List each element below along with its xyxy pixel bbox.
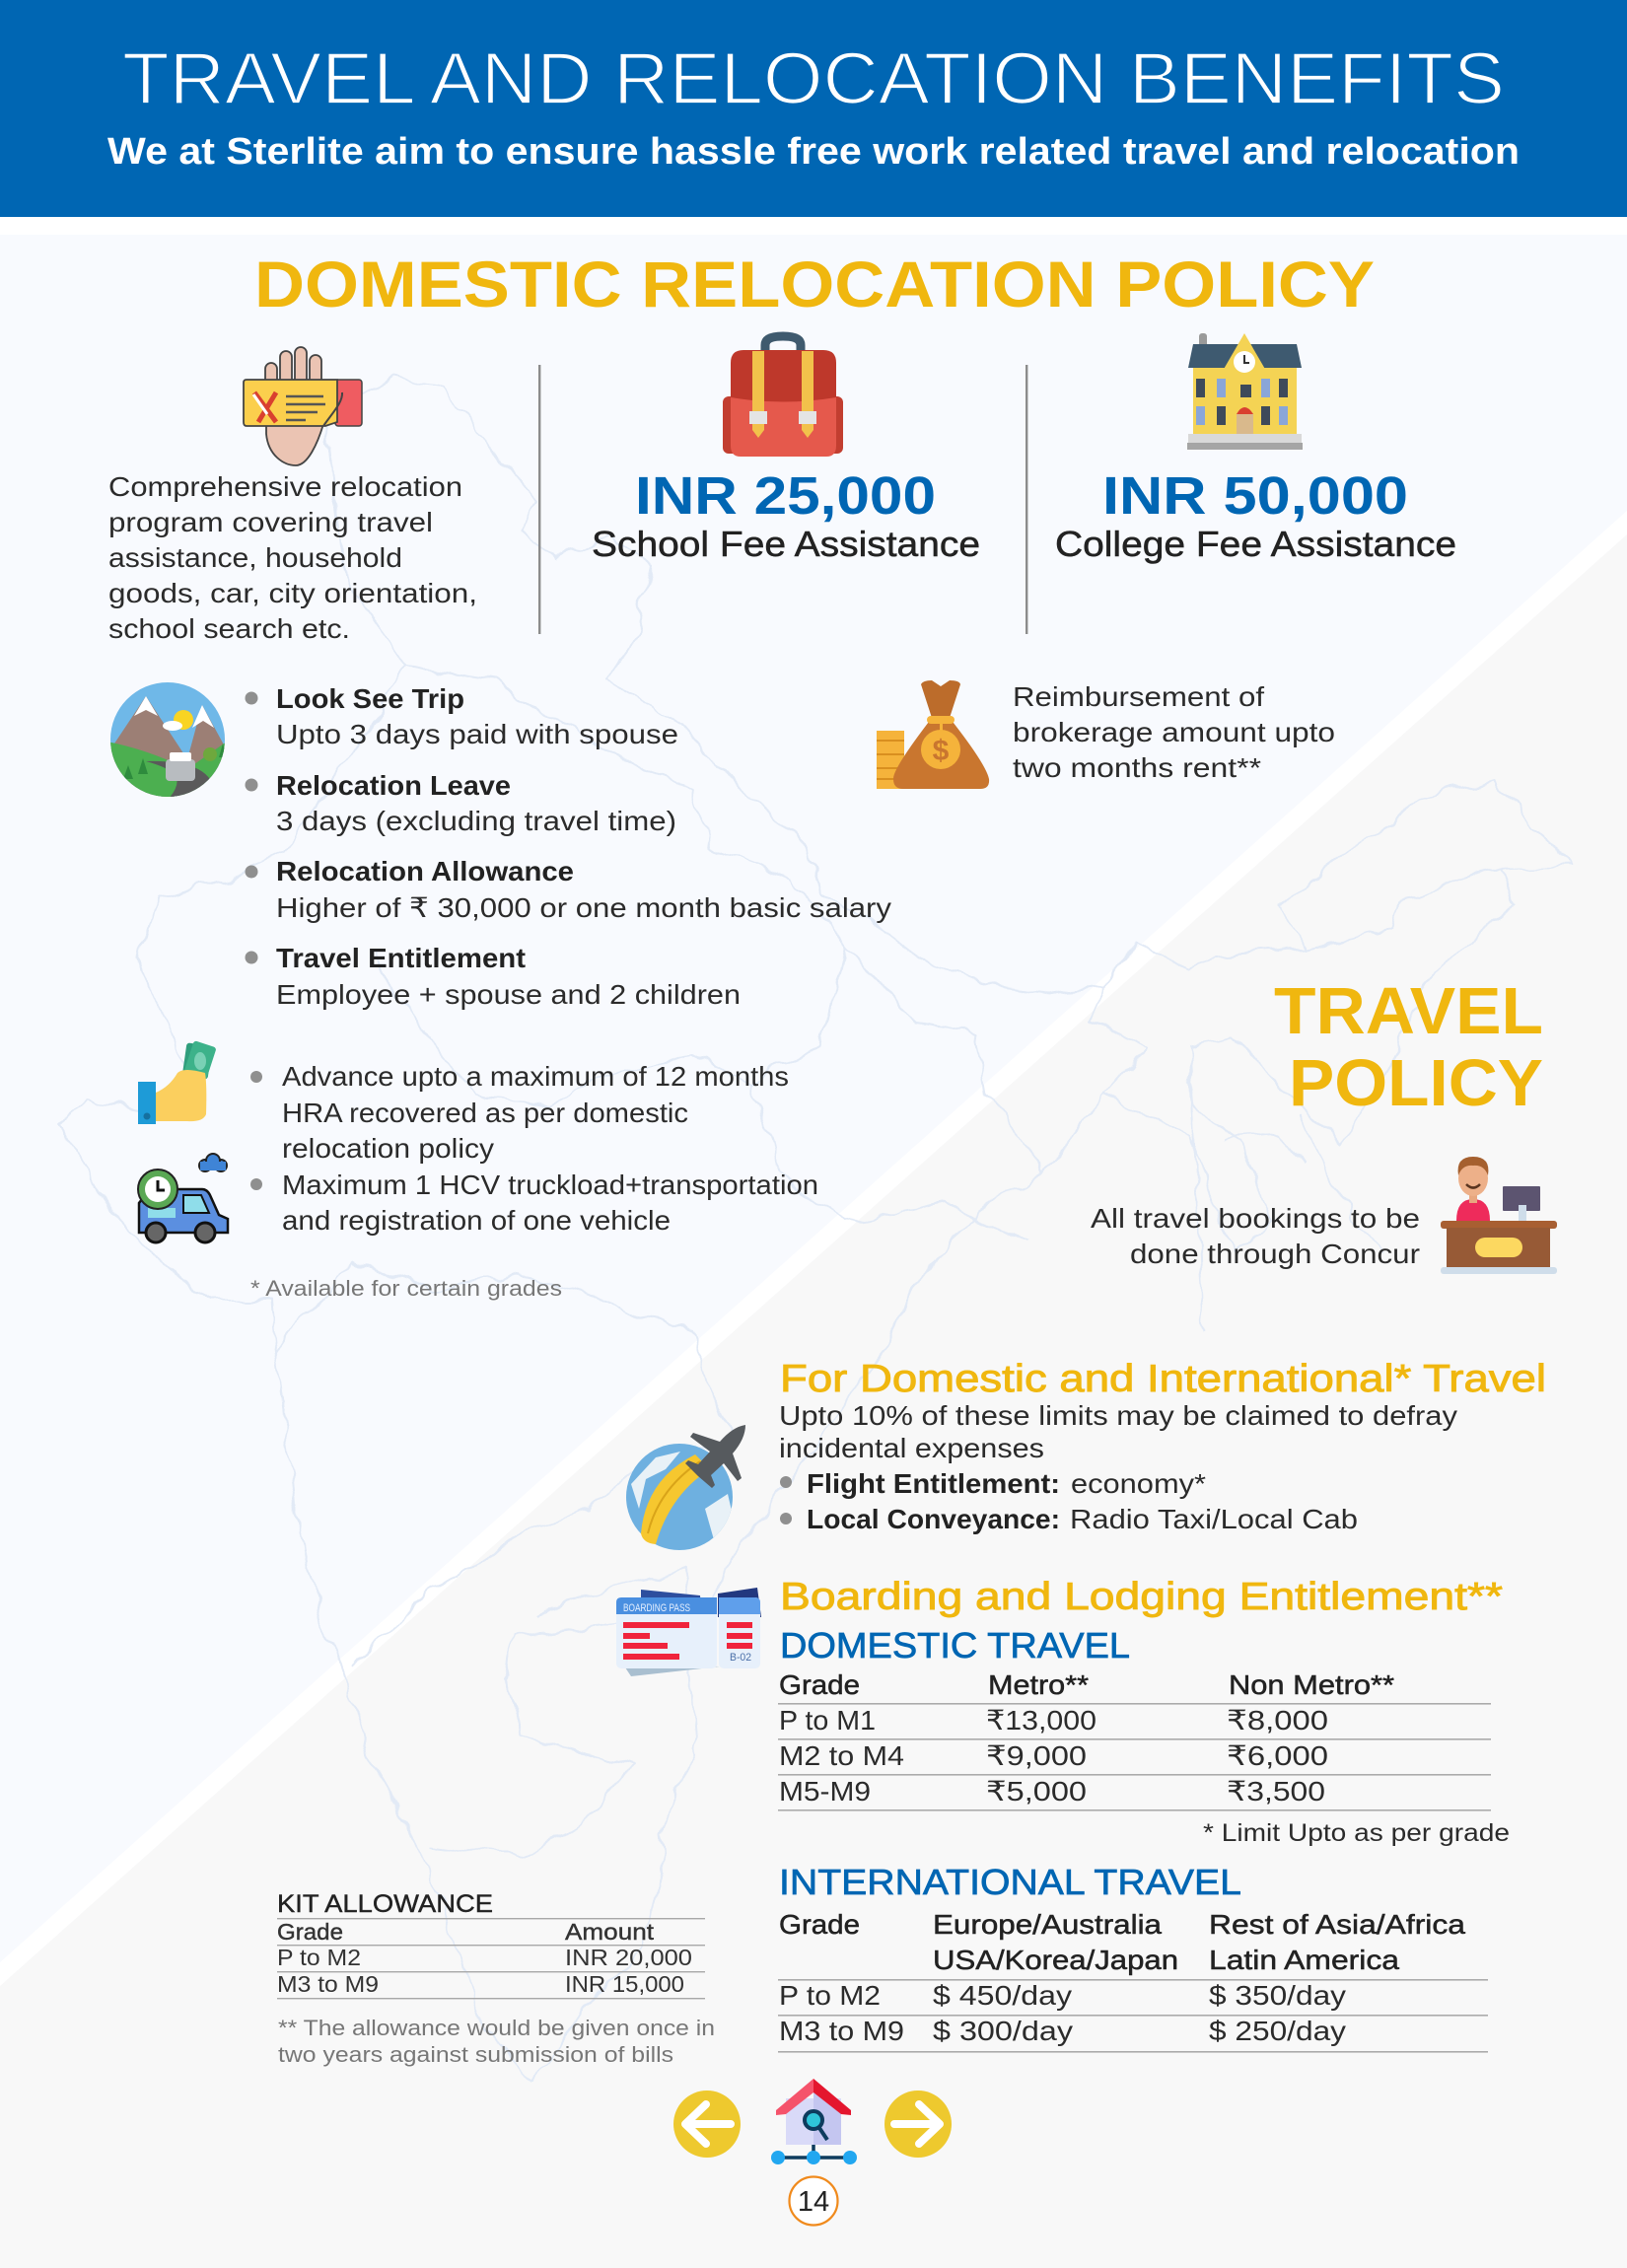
icon: globe with plane — [626, 1425, 745, 1550]
item: relocation leave: Relocation Leave — [276, 770, 511, 801]
item: relocation allowance: Higher of ₹ 30,000 or one month basic salary — [276, 892, 891, 923]
subtitle: We at Sterlite aim to ensure hassle free work related travel and relocation — [107, 131, 1520, 173]
footnote: limit per grade: * Limit Upto as per grade — [1203, 1819, 1510, 1847]
table: domestic travel: Non Metro** — [1229, 1669, 1394, 1700]
item: local conveyance — [780, 1504, 1358, 1534]
footnote: allowance — [278, 2016, 715, 2067]
amount: college fee — [1055, 466, 1456, 564]
table: international travel: M3 to M9 — [779, 2016, 904, 2046]
item: relocation leave: 3 days (excluding travel time) — [276, 806, 676, 836]
icon: hand with cash — [138, 1040, 217, 1124]
text: bookings through Concur — [1091, 1203, 1420, 1269]
footnote: certain grades: * Available for certain grades — [250, 1276, 562, 1301]
table: domestic travel: ₹3,500 — [1227, 1776, 1325, 1807]
item: truckload: and registration of one vehicle — [282, 1205, 671, 1236]
icon: backpack — [723, 336, 843, 457]
divider right — [1026, 365, 1027, 634]
item: advance: Advance upto a maximum of 12 months — [282, 1061, 789, 1092]
table: domestic travel: M5-M9 — [779, 1776, 871, 1807]
text: brokerage reimbursement: brokerage amount upto — [1013, 717, 1335, 747]
table: international travel: Grade — [779, 1909, 860, 1940]
item: truckload: Maximum 1 HCV truckload+transportation — [282, 1169, 818, 1200]
item: local conveyance: Local Conveyance: — [807, 1504, 1060, 1534]
item: look see trip: Upto 3 days paid with spouse — [276, 719, 678, 749]
table: domestic travel: ₹6,000 — [1227, 1740, 1328, 1771]
table: international travel: P to M2 — [779, 1980, 881, 2011]
table: kit allowance — [277, 1890, 705, 1999]
icon: money bag with coins — [877, 680, 989, 789]
table: domestic travel: ₹8,000 — [1227, 1705, 1328, 1736]
text: relocation program description: goods, car, city orientation, — [108, 578, 477, 608]
heading: travel policy: POLICY — [1289, 1046, 1543, 1120]
table: international travel — [778, 1909, 1488, 2053]
table: domestic travel: M2 to M4 — [779, 1740, 904, 1771]
item: flight entitlement — [780, 1468, 1206, 1499]
description: incidental expenses — [779, 1433, 1044, 1463]
heading: domestic travel: DOMESTIC TRAVEL — [780, 1625, 1130, 1666]
item: travel entitlement — [245, 943, 741, 1010]
item: truckload — [250, 1169, 818, 1236]
icon: money bag with coins: $ — [933, 735, 950, 767]
table: domestic travel: ₹13,000 — [986, 1705, 1096, 1736]
table: kit allowance: Grade — [277, 1919, 343, 1945]
table: international travel: $ 350/day — [1209, 1980, 1346, 2011]
heading: For Domestic and International* Travel — [780, 1358, 1546, 1400]
item: flight entitlement: economy* — [1071, 1468, 1206, 1499]
list: advance and truckload — [250, 1061, 818, 1236]
table: kit allowance: M3 to M9 — [277, 1971, 379, 1997]
table: international travel: Europe/Australia — [933, 1909, 1162, 1940]
table: international travel: Rest of Asia/Africa — [1209, 1909, 1465, 1940]
item: advance: relocation policy — [282, 1133, 494, 1164]
background map of India — [59, 379, 1571, 2081]
table: kit allowance: P to M2 — [277, 1945, 361, 1970]
table: kit allowance: KIT ALLOWANCE — [277, 1890, 493, 1918]
section: domestic and international travel — [779, 1358, 1546, 1534]
table: kit allowance: Amount — [565, 1919, 655, 1945]
heading: travel policy: TRAVEL — [1274, 974, 1543, 1048]
title: TRAVEL AND RELOCATION BENEFITS — [122, 37, 1505, 119]
icon: mountain road scene — [110, 682, 225, 797]
item: relocation leave — [245, 770, 676, 836]
table: domestic travel: ₹9,000 — [986, 1740, 1087, 1771]
page number: 14 — [798, 2186, 829, 2218]
table: international travel: $ 300/day — [933, 2016, 1073, 2046]
divider left — [538, 365, 540, 634]
icon: home search — [771, 2079, 857, 2164]
text: relocation program description: assistance, household — [108, 542, 402, 573]
text: bookings through Concur: All travel bookings to be — [1091, 1203, 1420, 1234]
table: international travel: USA/Korea/Japan — [933, 1945, 1178, 1975]
text: relocation program description: program covering travel — [108, 507, 433, 537]
icon: boarding pass: B-02 — [730, 1652, 751, 1664]
table: domestic travel: ₹5,000 — [986, 1776, 1087, 1807]
text: brokerage reimbursement — [1013, 681, 1335, 783]
item: relocation allowance — [245, 856, 891, 923]
header banner — [0, 0, 1627, 217]
table: domestic travel — [778, 1669, 1491, 1811]
table: international travel: Latin America — [1209, 1945, 1399, 1975]
page number — [789, 2177, 838, 2225]
text: bookings through Concur: done through Concur — [1130, 1239, 1420, 1269]
text: relocation program description: school search etc. — [108, 613, 350, 644]
amount: school fee: INR 25,000 — [635, 466, 936, 526]
description: Upto 10% of these limits may be claimed to defray — [779, 1400, 1457, 1431]
item: look see trip: Look See Trip — [276, 683, 464, 714]
amount: school fee — [592, 466, 980, 564]
icon: back arrow — [673, 2091, 741, 2158]
table: domestic travel: Grade — [779, 1669, 860, 1700]
item: travel entitlement: Employee + spouse and 2 children — [276, 979, 741, 1010]
item: advance: HRA recovered as per domestic — [282, 1098, 688, 1128]
item: relocation allowance: Relocation Allowance — [276, 856, 574, 886]
icon: truck with clock — [138, 1154, 228, 1242]
text: relocation program description — [108, 471, 477, 644]
heading: travel policy — [1274, 974, 1543, 1120]
item: travel entitlement: Travel Entitlement — [276, 943, 526, 973]
icon: hand holding ticket — [244, 347, 362, 465]
table: international travel: $ 250/day — [1209, 2016, 1346, 2046]
icon: boarding pass: BOARDING PASS — [623, 1602, 690, 1614]
item: advance — [250, 1061, 789, 1164]
icon: next arrow — [884, 2091, 952, 2158]
list: relocation benefits — [245, 683, 891, 1010]
table: domestic travel: Metro** — [988, 1669, 1089, 1700]
table: international travel: $ 450/day — [933, 1980, 1072, 2011]
table: domestic travel: P to M1 — [779, 1705, 876, 1736]
icon: person at desk — [1441, 1157, 1557, 1274]
description — [779, 1400, 1457, 1463]
label: college fee assistance: College Fee Assistance — [1055, 524, 1456, 564]
icon: school building — [1187, 333, 1303, 450]
table: kit allowance: INR 20,000 — [565, 1945, 692, 1970]
label: school fee assistance: School Fee Assistance — [592, 524, 980, 564]
text: brokerage reimbursement: Reimbursement of — [1013, 681, 1264, 712]
heading: international travel: INTERNATIONAL TRAVEL — [779, 1862, 1241, 1902]
text: brokerage reimbursement: two months rent** — [1013, 752, 1261, 783]
item: flight entitlement: Flight Entitlement: — [807, 1468, 1060, 1499]
amount: college fee: INR 50,000 — [1102, 466, 1408, 526]
footnote: allowance: two years against submission of bills — [278, 2042, 673, 2067]
heading: boarding and lodging: Boarding and Lodging Entitlement** — [780, 1576, 1503, 1618]
table: kit allowance: INR 15,000 — [565, 1971, 684, 1997]
text: relocation program description: Comprehensive relocation — [108, 471, 462, 502]
item: local conveyance: Radio Taxi/Local Cab — [1070, 1504, 1358, 1534]
footnote: allowance: ** The allowance would be given once in — [278, 2016, 715, 2040]
heading: domestic relocation policy: DOMESTIC RELOCATION POLICY — [254, 248, 1375, 320]
item: look see trip — [245, 683, 678, 749]
icon: boarding pass — [616, 1588, 761, 1676]
